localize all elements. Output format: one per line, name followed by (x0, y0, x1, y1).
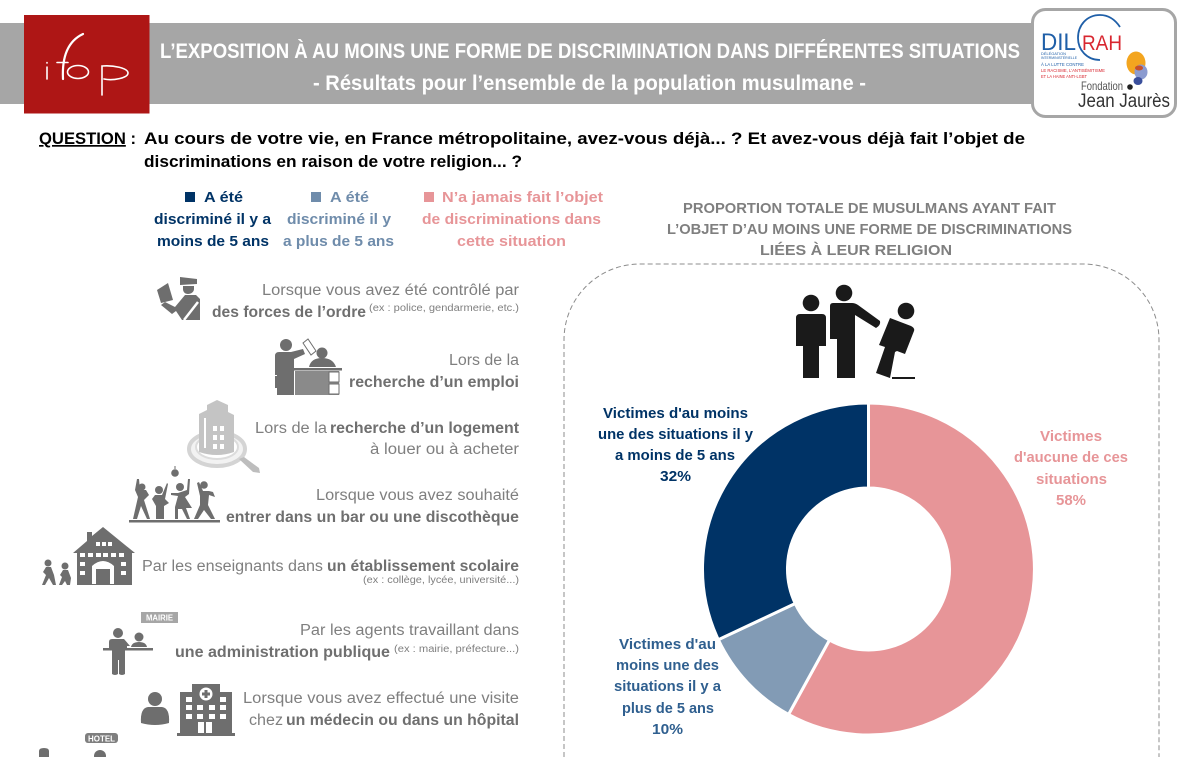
donut label: plus de 5 ans: plus de 5 ans (622, 700, 714, 717)
legend: plus de 5 ans: A été (330, 189, 369, 206)
segment: plus de 5 ans 10% (718, 604, 830, 714)
icon: three people, discrimination (796, 285, 915, 379)
panel heading: proportion totale: LIÉES À LEUR RELIGION (760, 242, 952, 259)
row: établissement scolaire: Par les enseignants dans (142, 558, 323, 575)
donut label: aucune: Victimes (1040, 428, 1102, 445)
panel heading: proportion totale (667, 200, 1072, 259)
donut label: plus de 5 ans: moins une des (616, 657, 719, 674)
legend: jamais (422, 189, 603, 250)
donut chart (702, 403, 1034, 735)
row: médecin ou hôpital: un médecin ou dans un hôpital (286, 712, 519, 729)
title: L’EXPOSITION À AU MOINS UNE FORME DE DISCRIMINATION DANS DIFFÉRENTES SITUATIONS (160, 40, 1020, 63)
icon: town hall counter (103, 612, 178, 675)
row: administration publique (103, 612, 519, 675)
icon: town hall counter: MAIRIE (146, 612, 173, 622)
donut label: plus de 5 ans: situations il y a (614, 678, 722, 695)
donut label: moins de 5 ans: a moins de 5 ans (615, 447, 735, 464)
row: établissement scolaire (42, 527, 519, 586)
title: - Résultats pour l’ensemble de la population musulmane - (313, 72, 866, 95)
row: forces de l'ordre: (ex : police, gendarmerie, etc.) (369, 303, 519, 314)
icon: school and children (42, 527, 135, 585)
row: établissement scolaire: (ex : collège, lycée, université...) (363, 575, 519, 586)
legend: plus de 5 ans (283, 189, 394, 250)
donut label: aucune: situations (1036, 471, 1107, 488)
row: emploi: Lors de la (449, 352, 519, 369)
row: forces de l'ordre: des forces de l’ordre (212, 304, 366, 321)
icon: hotel, cropped row: HOTEL (88, 734, 115, 744)
icon: job interview desk (275, 339, 342, 395)
logo: DILCRAH and Fondation Jean Jaurès: À LA LUTTE CONTRE (1041, 61, 1084, 67)
row: logement (189, 400, 519, 473)
row: logement: Lors de la (255, 420, 327, 437)
donut label: moins de 5 ans: Victimes d'au moins (603, 405, 748, 422)
icon: doctor and hospital (141, 684, 235, 736)
legend: moins de 5 ans (154, 189, 272, 250)
question: QUESTION : (39, 129, 136, 148)
legend: jamais: de discriminations dans (422, 211, 601, 228)
segment: moins de 5 ans 32% (702, 403, 868, 640)
legend: jamais: N’a jamais fait l’objet (442, 189, 603, 206)
donut label: aucune: d'aucune de ces (1014, 449, 1128, 466)
panel heading: proportion totale: PROPORTION TOTALE DE MUSULMANS AYANT FAIT (683, 200, 1056, 217)
row: logement: recherche d’un logement (330, 420, 519, 437)
logo: DILCRAH and Fondation Jean Jaurès: DIL (1041, 29, 1076, 56)
header band (0, 23, 1040, 104)
donut label: moins de 5 ans (598, 405, 754, 485)
legend: moins de 5 ans: moins de 5 ans (157, 233, 269, 250)
question: Au cours de votre vie, en France métropolitaine, avez-vous déjà... ? Et avez-vous déjà fait l’objet de (144, 129, 1025, 148)
legend: moins de 5 ans: discriminé il y a (154, 211, 272, 228)
logo: DILCRAH and Fondation Jean Jaurès: ET LA HAINE ANTI-LGBT (1041, 74, 1087, 79)
row: médecin ou hôpital: chez (249, 712, 283, 729)
logo: DILCRAH and Fondation Jean Jaurès (1032, 10, 1176, 116)
icon: dancers (129, 466, 220, 522)
row: emploi: recherche d’un emploi (349, 374, 519, 391)
donut label: aucune: 58% (1056, 492, 1086, 509)
donut label: plus de 5 ans (614, 636, 722, 738)
panel heading: proportion totale: L’OBJET D’AU MOINS UNE FORME DE DISCRIMINATIONS (667, 221, 1072, 238)
logo: DILCRAH and Fondation Jean Jaurès: DÉLÉGATION (1041, 51, 1066, 56)
row: administration publique: une administration publique (175, 644, 390, 661)
logo: DILCRAH and Fondation Jean Jaurès: LE RACISME, L’ANTISÉMITISME (1041, 67, 1105, 73)
logo: DILCRAH and Fondation Jean Jaurès: Fondation (1081, 79, 1123, 93)
row: bar ou discothèque: Lorsque vous avez souhaité (316, 487, 519, 504)
row: administration publique: (ex : mairie, préfecture...) (394, 644, 519, 655)
legend: plus de 5 ans: a plus de 5 ans (283, 233, 394, 250)
donut label: plus de 5 ans: Victimes d'au (619, 636, 716, 653)
icon: police officer (157, 277, 200, 320)
donut label: aucune (1014, 428, 1128, 509)
donut label: plus de 5 ans: 10% (652, 721, 683, 738)
row: forces de l'ordre: Lorsque vous avez été contrôlé par (262, 282, 519, 299)
icon: hotel, cropped row (39, 733, 118, 757)
row: médecin ou hôpital (141, 684, 519, 736)
legend: jamais: cette situation (457, 233, 566, 250)
row: bar ou discothèque (129, 466, 519, 526)
logo: DILCRAH and Fondation Jean Jaurès: INTERMINISTÉRIELLE (1041, 55, 1077, 60)
donut label: moins de 5 ans: une des situations il y (598, 426, 754, 443)
legend: moins de 5 ans: A été (204, 189, 243, 206)
donut label: moins de 5 ans: 32% (660, 468, 691, 485)
row: administration publique: Par les agents travaillant dans (300, 622, 519, 639)
row: établissement scolaire: un établissement scolaire (327, 558, 519, 575)
legend: plus de 5 ans: discriminé il y (287, 211, 392, 228)
segment: aucune 58% (788, 403, 1034, 735)
row: médecin ou hôpital: Lorsque vous avez effectué une visite (243, 690, 519, 707)
icon: building under magnifier (189, 400, 260, 473)
row: forces de l'ordre (157, 277, 519, 321)
question: discriminations en raison de votre religion... ? (144, 152, 522, 171)
logo: ifop (24, 15, 150, 114)
logo: DILCRAH and Fondation Jean Jaurès: RAH (1082, 32, 1122, 55)
row: emploi (275, 339, 519, 395)
row: bar ou discothèque: entrer dans un bar ou une discothèque (226, 509, 519, 526)
title (160, 40, 1020, 95)
panel: dashed outline (564, 264, 1159, 757)
row: logement: à louer ou à acheter (370, 441, 519, 458)
legend (154, 189, 603, 250)
question (39, 129, 1025, 171)
